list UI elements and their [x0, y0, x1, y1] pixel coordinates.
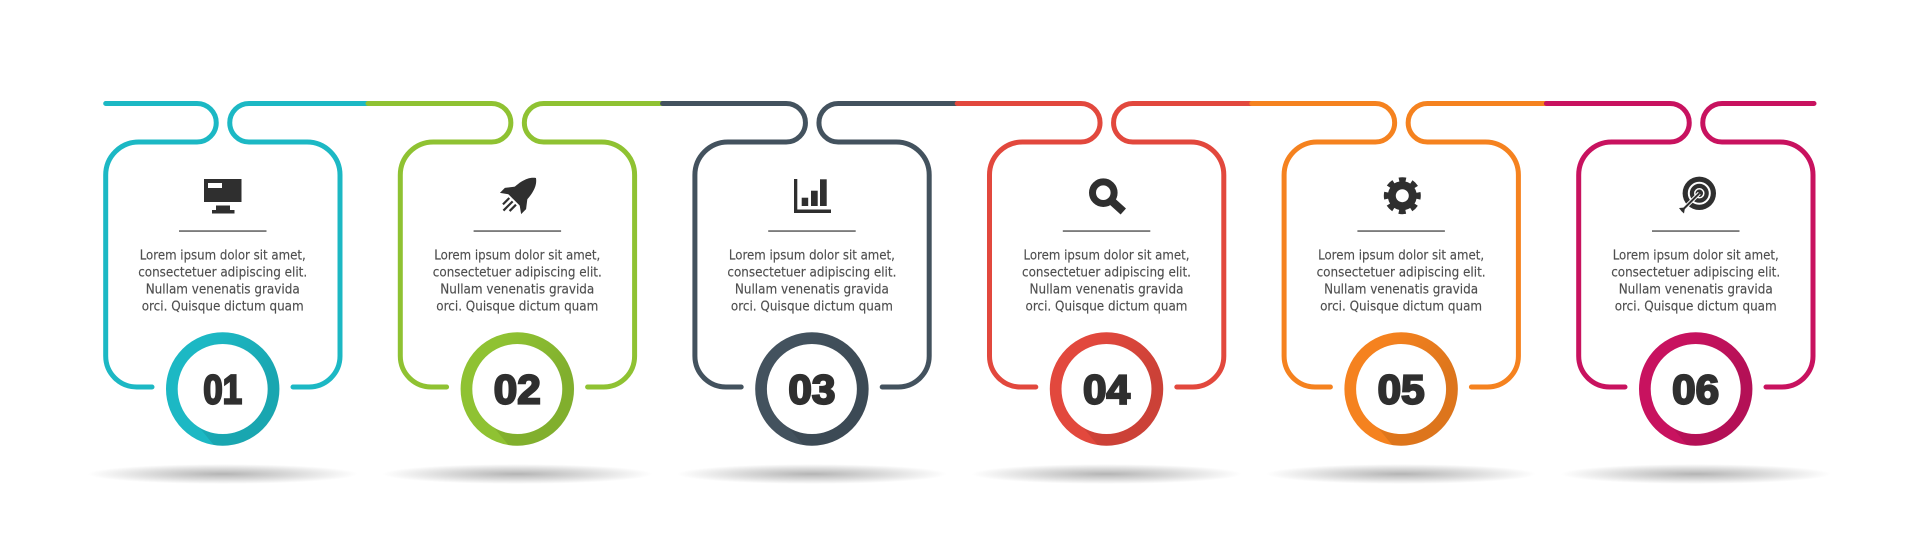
- badge 05: 05: [1378, 366, 1425, 412]
- shadow 05: [1266, 464, 1536, 484]
- panel: step 03: [663, 104, 957, 484]
- badge 04: 04: [1083, 366, 1130, 412]
- outline 06: [1546, 104, 1814, 387]
- panel: step 04: [957, 104, 1252, 484]
- text 04: Lorem ipsum dolor sit amet,: [1023, 248, 1189, 264]
- icon: monitor: [204, 179, 242, 214]
- outline 03: [663, 104, 957, 387]
- text 01: Lorem ipsum dolor sit amet,: [140, 248, 306, 264]
- shadow 03: [677, 464, 947, 484]
- text 01: consectetuer adipiscing elit.: [138, 266, 307, 280]
- text 01: orci. Quisque dictum quam: [142, 300, 304, 314]
- badge 06: 06: [1672, 366, 1719, 412]
- badge 03: [761, 332, 869, 446]
- icon: target: [1679, 177, 1716, 214]
- text 03: Nullam venenatis gravida: [735, 282, 889, 298]
- shadow 06: [1561, 464, 1831, 484]
- badge 04: [1056, 332, 1163, 446]
- badge 03: 03: [788, 366, 835, 412]
- panel: step 06: [1546, 104, 1831, 484]
- divider: [1652, 230, 1740, 232]
- text 03: orci. Quisque dictum quam: [731, 300, 893, 314]
- text 05: Nullam venenatis gravida: [1324, 282, 1478, 298]
- text 02: Nullam venenatis gravida: [440, 282, 594, 298]
- divider: [474, 230, 561, 232]
- text 04: orci. Quisque dictum quam: [1026, 300, 1188, 314]
- text 04: consectetuer adipiscing elit.: [1022, 266, 1191, 280]
- text 06: consectetuer adipiscing elit.: [1611, 266, 1780, 280]
- outline 04: [957, 104, 1252, 387]
- text 01: Nullam venenatis gravida: [146, 282, 300, 298]
- divider: [179, 230, 266, 232]
- text 05: Lorem ipsum dolor sit amet,: [1318, 248, 1484, 264]
- outline 05: [1252, 104, 1546, 387]
- badge 05: [1350, 332, 1458, 446]
- divider: [1063, 230, 1150, 232]
- badge 01: [172, 332, 280, 446]
- divider: [1357, 230, 1445, 232]
- text 02: Lorem ipsum dolor sit amet,: [434, 248, 600, 264]
- icon: magnifier: [1092, 182, 1123, 212]
- shadow 04: [972, 464, 1242, 484]
- panel: step 02: [368, 104, 663, 484]
- text 06: Lorem ipsum dolor sit amet,: [1613, 248, 1779, 264]
- badge 02: 02: [494, 366, 541, 412]
- badge 02: [466, 332, 574, 446]
- icon: bar chart: [794, 179, 831, 213]
- icon: gear: [1386, 180, 1418, 212]
- outline 02: [368, 104, 663, 387]
- outline 01: [106, 104, 368, 387]
- text 06: orci. Quisque dictum quam: [1615, 300, 1777, 314]
- text 04: Nullam venenatis gravida: [1029, 282, 1183, 298]
- text 02: consectetuer adipiscing elit.: [433, 266, 602, 280]
- shadow 02: [382, 464, 652, 484]
- text 05: orci. Quisque dictum quam: [1320, 300, 1482, 314]
- text 05: consectetuer adipiscing elit.: [1317, 266, 1486, 280]
- text 02: orci. Quisque dictum quam: [436, 300, 598, 314]
- badge 06: [1645, 332, 1753, 446]
- shadow 01: [88, 464, 358, 484]
- text 06: Nullam venenatis gravida: [1619, 282, 1773, 298]
- text 03: Lorem ipsum dolor sit amet,: [729, 248, 895, 264]
- panel: step 01: [88, 104, 368, 484]
- divider: [768, 230, 856, 232]
- panel: step 05: [1252, 104, 1546, 484]
- badge 01: 01: [203, 366, 242, 412]
- icon: rocket: [493, 167, 547, 221]
- text 03: consectetuer adipiscing elit.: [727, 266, 896, 280]
